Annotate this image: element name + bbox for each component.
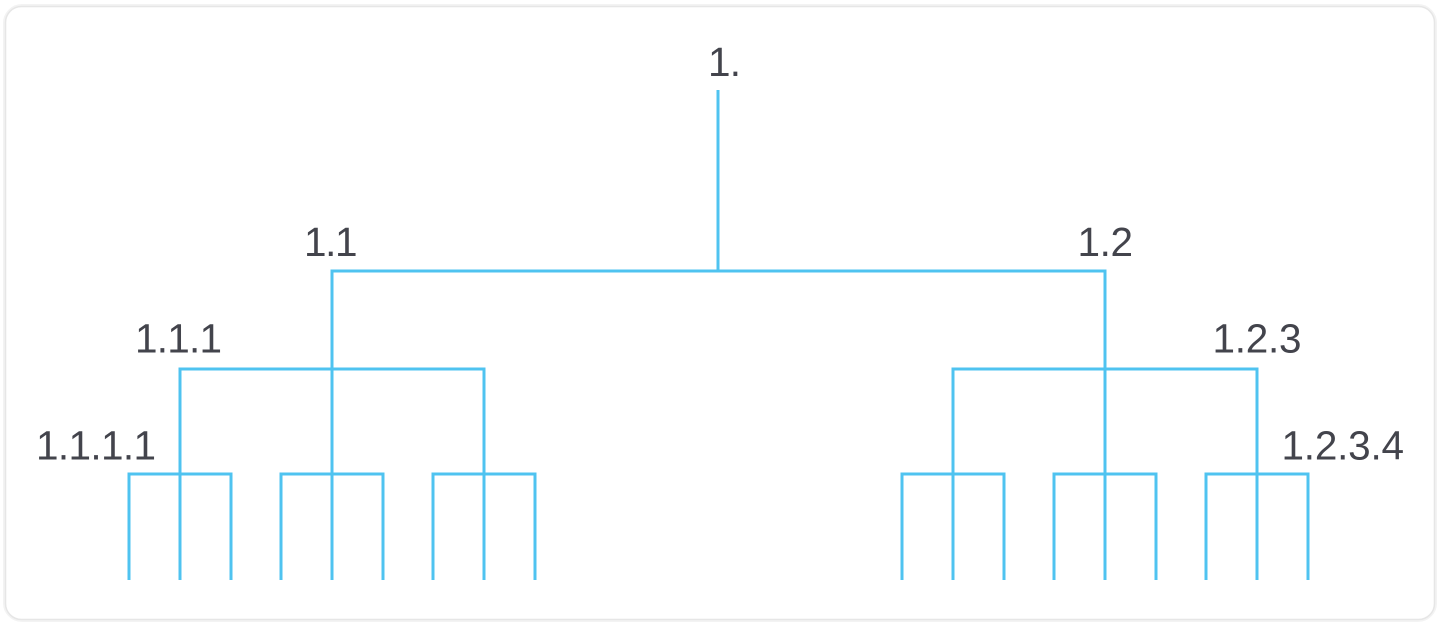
root stem and level 2 bar: [332, 90, 1105, 369]
label: 1.2.3: 1.2.3: [1212, 316, 1302, 362]
right leaf brackets: [902, 474, 1308, 580]
label: 1.1.1: 1.1.1: [135, 316, 222, 362]
right level 3 bracket: [953, 369, 1257, 474]
label: 1.2: 1.2: [1078, 219, 1133, 265]
left level 3 bracket: [180, 369, 484, 474]
label: 1.2.3.4: 1.2.3.4: [1282, 422, 1404, 468]
label: 1.1.1.1: 1.1.1.1: [36, 422, 156, 468]
tree connector lines: [129, 90, 1308, 580]
label: root: 1.: [708, 39, 741, 85]
label: 1.1: 1.1: [304, 219, 358, 265]
left leaf brackets: [129, 474, 535, 580]
